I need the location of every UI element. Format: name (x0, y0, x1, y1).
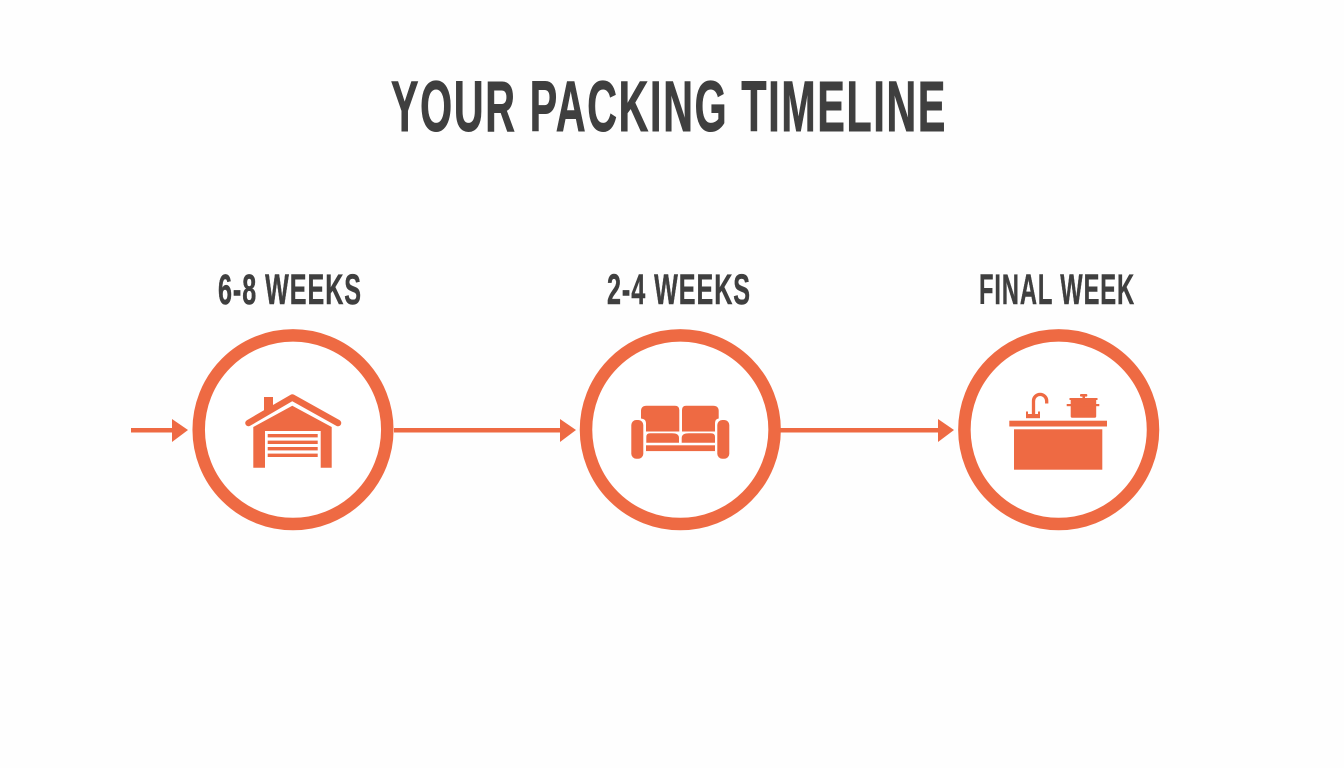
label: 2-4 weeks: 2-4 WEEKS (607, 267, 751, 314)
title: YOUR PACKING TIMELINE (391, 68, 947, 147)
step 3 circle (964, 335, 1153, 524)
arrow: first to second step (394, 419, 576, 442)
arrow: entry (131, 419, 188, 442)
step 1 circle (199, 335, 387, 524)
label: final week: FINAL WEEK (979, 267, 1135, 314)
arrow: second to third step (780, 419, 954, 442)
icon: house with garage (248, 397, 338, 468)
icon: kitchen counter with faucet and pot (1009, 394, 1107, 470)
label: 6-8 weeks: 6-8 WEEKS (218, 267, 362, 314)
step 2 circle (586, 335, 775, 524)
icon: sofa (631, 406, 729, 459)
